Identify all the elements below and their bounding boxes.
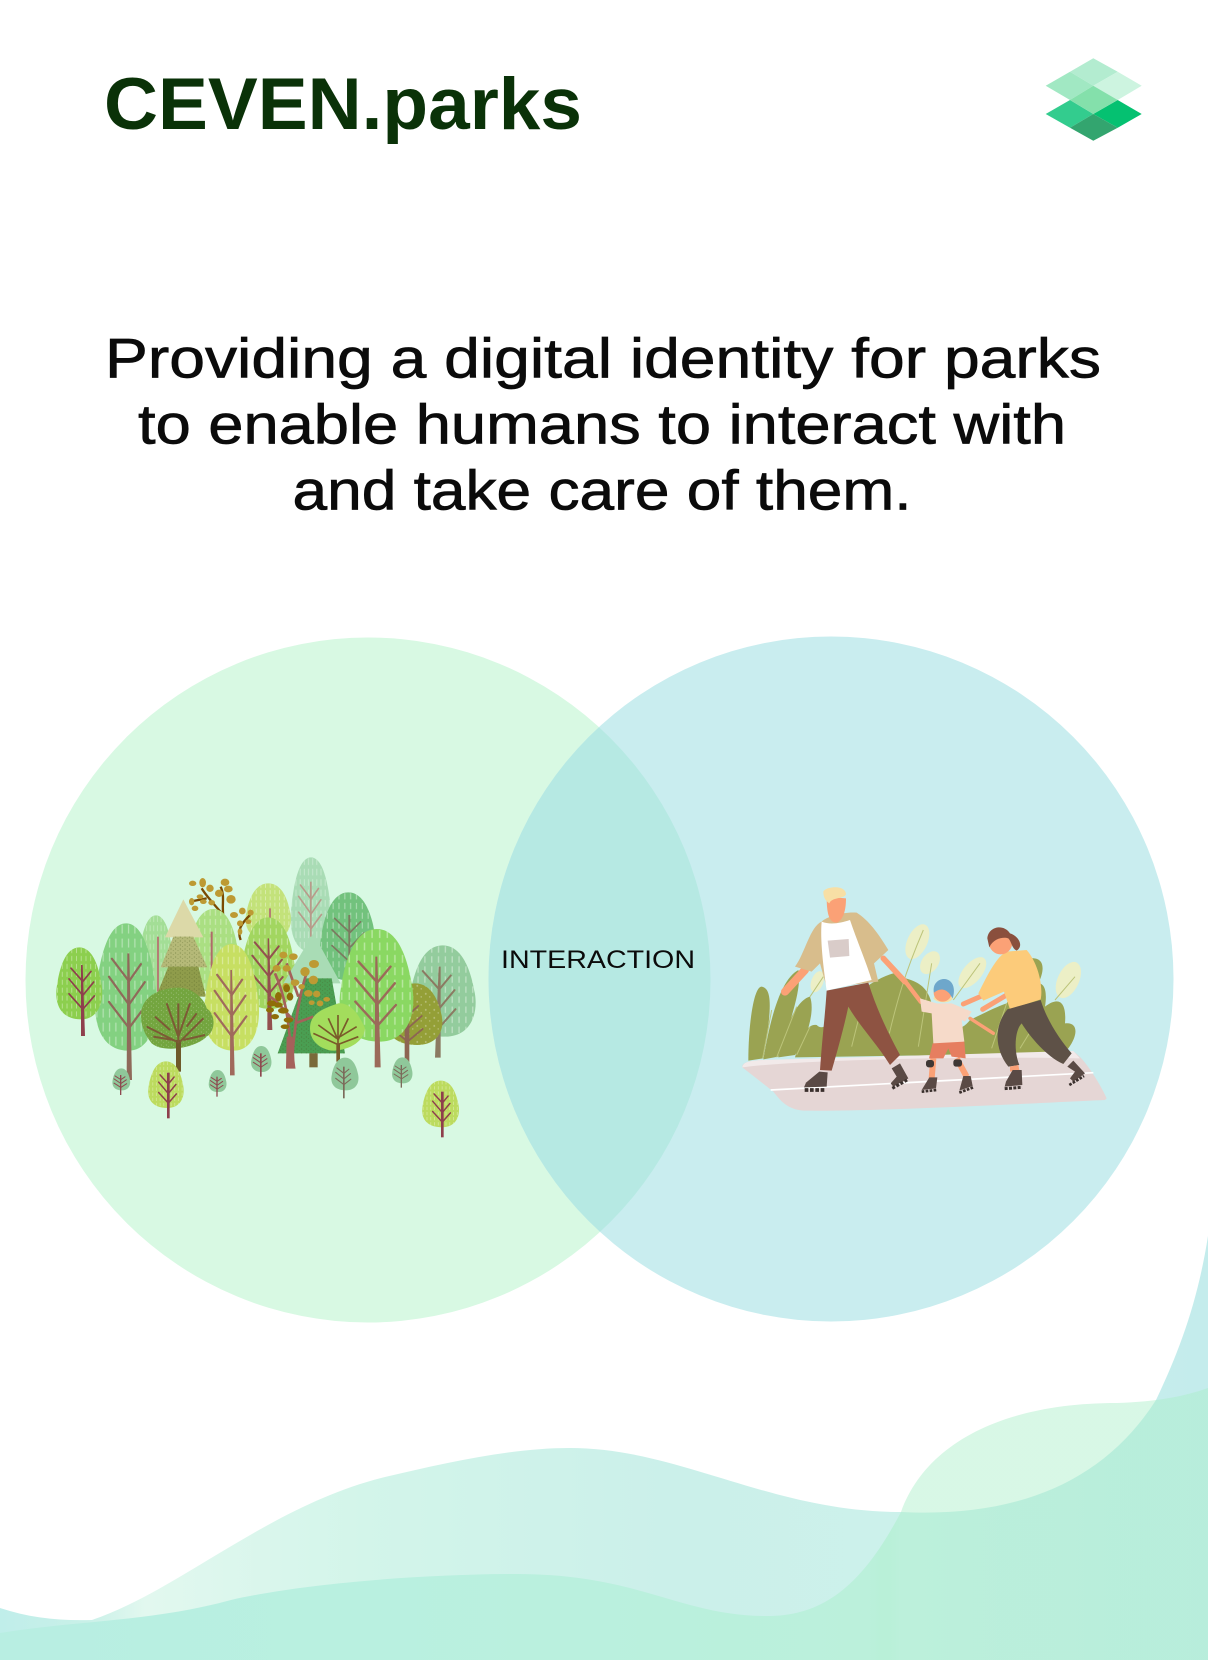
interaction label: INTERACTION [501, 946, 695, 974]
woman figure [963, 927, 1085, 1089]
venn overlap: interaction [488, 728, 710, 1232]
tree: bright round [310, 1003, 365, 1062]
tree: green back left [138, 915, 174, 999]
illustration: forest of trees [56, 857, 476, 1137]
tree: rightmost [409, 945, 476, 1058]
small tree 2 [148, 1061, 184, 1118]
tree: dark green conifer [278, 978, 345, 1067]
tree: yellow-green back [246, 883, 291, 940]
heading [105, 326, 1101, 522]
venn circle: humans [488, 636, 1174, 1322]
tree: pale back [291, 857, 331, 952]
plant stems [763, 930, 1075, 1058]
tree: leftmost [56, 947, 102, 1036]
small tree 4 [251, 1046, 271, 1077]
heading: to enable humans to interact with [138, 392, 1066, 456]
small tree 1 [112, 1068, 130, 1095]
icon: layered diamond logo [1046, 58, 1142, 141]
tree: green middle [241, 917, 295, 1030]
tree: dark green right [320, 892, 376, 981]
small tree 7 [422, 1081, 459, 1137]
pale background leaves [808, 921, 1086, 1002]
heading: and take care of them. [292, 458, 912, 522]
small tree 3 [209, 1070, 227, 1097]
bottom wave: teal [0, 1236, 1208, 1660]
tree: tiered conifer [156, 899, 207, 997]
olive bushes [748, 958, 1075, 1061]
small tree 6 [392, 1057, 412, 1088]
venn circle: nature [26, 638, 710, 1322]
tree: dark round [141, 988, 214, 1072]
tree: yellow-green [204, 944, 259, 1075]
man figure [785, 887, 908, 1090]
tree: golden autumn branches [189, 878, 254, 940]
bottom wave: green [0, 1388, 1208, 1660]
tree: olive [387, 983, 442, 1063]
road [742, 1051, 1107, 1111]
tree: green centre back [187, 909, 239, 992]
small tree 5 [331, 1058, 359, 1098]
title: CEVEN.parks [104, 64, 582, 145]
tree: tall left [95, 923, 157, 1080]
child figure [907, 979, 993, 1093]
heading: Providing a digital identity for parks [105, 326, 1101, 390]
tree: brown autumn foreground [266, 952, 330, 1067]
tree: pale conifer [283, 933, 341, 983]
tree: large bright green [340, 929, 413, 1067]
illustration: family rollerblading [742, 887, 1107, 1111]
